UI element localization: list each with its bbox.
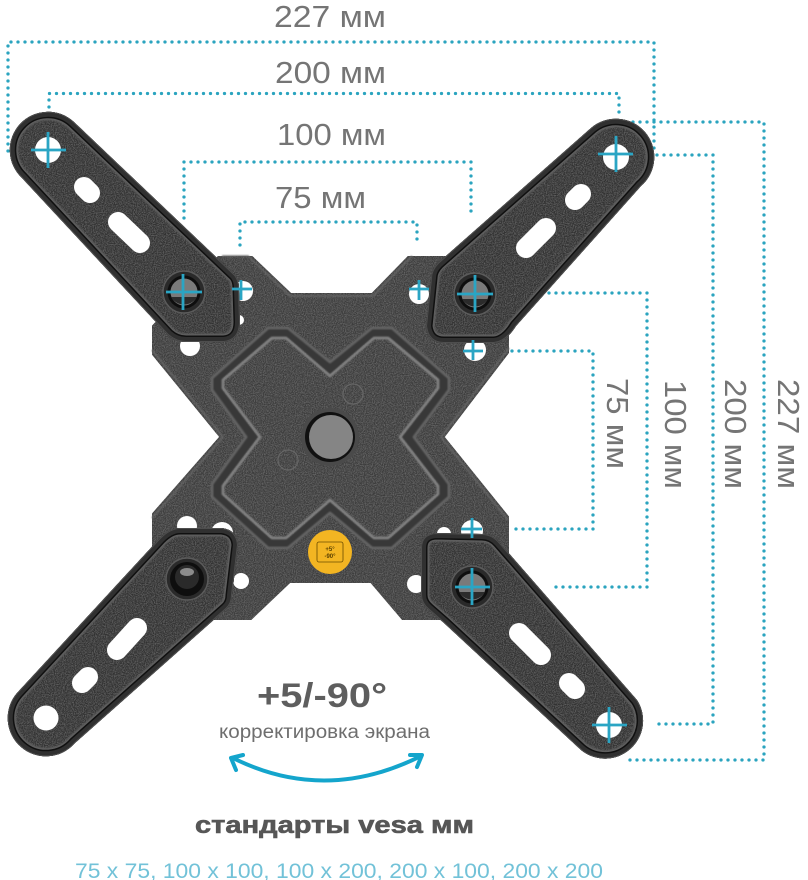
plate mounting holes xyxy=(177,281,486,593)
screw xyxy=(163,271,205,313)
horizontal dimension labels: 200 мм xyxy=(275,55,386,90)
rotation value heading: +5/-90° xyxy=(257,677,387,715)
VESA heading: стандарты vesa мм xyxy=(195,812,474,839)
horizontal dimension labels: 227 мм xyxy=(274,0,386,34)
small embossed circles xyxy=(278,384,363,470)
arrow: rotation range xyxy=(231,755,422,781)
dotted dimension lines xyxy=(8,42,764,760)
arm: bottom right xyxy=(421,533,643,759)
base plate xyxy=(152,256,509,620)
gold sticker: -90° xyxy=(324,554,336,560)
vertical dimension labels: 227 мм xyxy=(771,379,806,489)
plate edge highlight xyxy=(152,256,509,520)
embossed X outer xyxy=(212,328,449,548)
vertical dimension labels xyxy=(600,378,806,489)
embossed X inner xyxy=(223,338,438,538)
horizontal dimension labels xyxy=(274,0,386,215)
arm: top right xyxy=(426,119,654,343)
blue crosshairs xyxy=(31,132,633,743)
vertical dimension labels: 75 мм xyxy=(600,378,635,469)
rotation caption: корректировка экрана xyxy=(219,722,430,743)
arm: top left xyxy=(10,112,240,342)
vertical dimension labels: 100 мм xyxy=(658,380,693,489)
arm: bottom left xyxy=(8,528,238,756)
center pivot disc xyxy=(301,408,359,466)
horizontal dimension labels: 100 мм xyxy=(277,117,386,152)
horizontal dimension labels: 75 мм xyxy=(275,180,366,215)
screw xyxy=(166,558,208,600)
screw xyxy=(451,566,493,608)
screw xyxy=(454,273,496,315)
gold sticker xyxy=(308,530,352,574)
gold sticker: +5° xyxy=(325,547,335,553)
vertical dimension labels: 200 мм xyxy=(718,379,753,489)
